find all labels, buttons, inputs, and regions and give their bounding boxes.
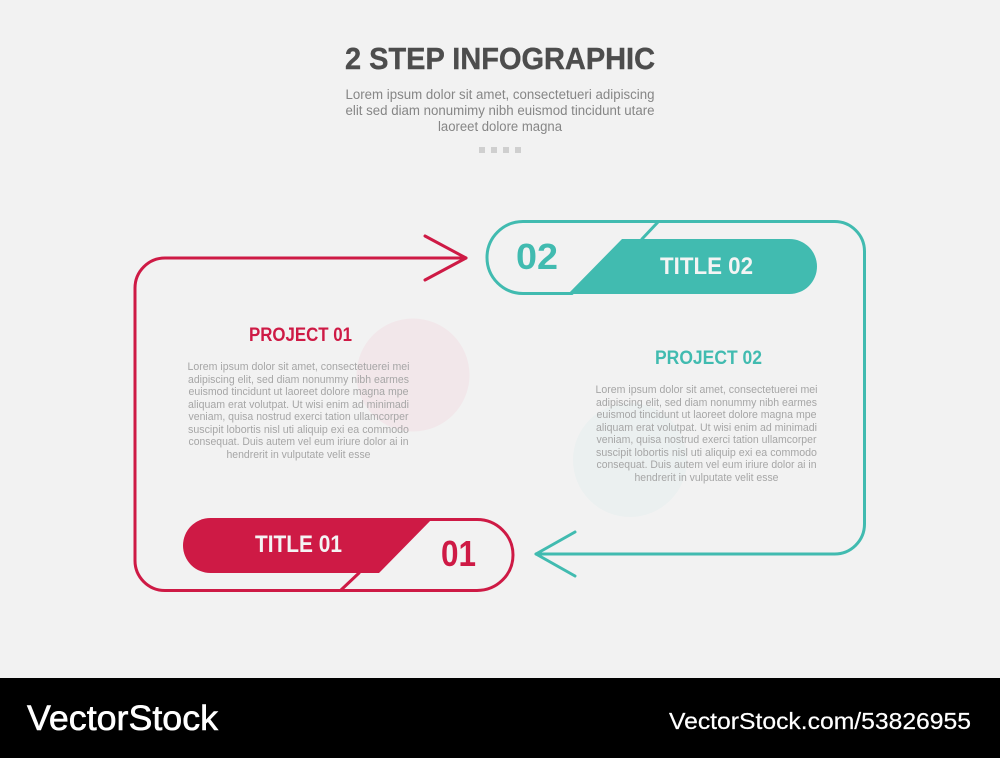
footer bar	[0, 678, 1000, 758]
title badge 02	[568, 239, 817, 294]
project 01 body text: suscipit lobortis nisl uti aliquip exi ea commodo	[188, 424, 409, 436]
project 02 body text	[596, 384, 818, 484]
project 01 heading: PROJECT 01	[249, 325, 352, 346]
panel: project 01	[188, 325, 410, 461]
decorative circle: project 01	[356, 318, 470, 432]
subtitle	[346, 87, 654, 134]
project 02 body text: veniam, quisa nostrud exerci tation ullamcorper	[596, 434, 817, 446]
project 02 body text: consequat. Duis autem vel eum iriure dolor ai in	[596, 459, 816, 471]
dots divider	[479, 147, 521, 153]
subtitle: Lorem ipsum dolor sit amet, consectetueri adipiscing	[346, 87, 654, 102]
step number 01: 01	[441, 533, 476, 574]
subtitle: elit sed diam nonumimy nibh euismod tincidunt utare	[346, 103, 654, 118]
project 02 body text: Lorem ipsum dolor sit amet, consectetuerei mei	[596, 384, 818, 396]
project 01 body text: veniam, quisa nostrud exerci tation ullamcorper	[188, 411, 409, 423]
footer bar: VectorStock	[27, 699, 219, 738]
project 01 body text: hendrerit in vulputate velit esse	[226, 449, 370, 461]
step 01: red loop arrow	[135, 236, 513, 590]
project 02 body text: adipiscing elit, sed diam nonummy nibh earmes	[596, 397, 817, 409]
title: 2 STEP INFOGRAPHIC	[345, 41, 655, 76]
project 02 body text: suscipit lobortis nisl uti aliquip exi ea commodo	[596, 447, 817, 459]
project 02 body text: aliquam erat volutpat. Ut wisi enim ad minimadi	[596, 422, 817, 434]
footer bar: VectorStock.com/53826955	[669, 708, 971, 734]
project 02 body text: hendrerit in vulputate velit esse	[634, 472, 778, 484]
project 01 body text: consequat. Duis autem vel eum iriure dolor ai in	[188, 436, 408, 448]
project 02 heading: PROJECT 02	[655, 348, 762, 369]
title badge 01: TITLE 01	[255, 531, 342, 558]
heading block	[345, 41, 655, 153]
decorative circle: project 02	[573, 403, 687, 517]
title badge 01	[183, 518, 433, 573]
project 01 body text: aliquam erat volutpat. Ut wisi enim ad minimadi	[188, 399, 409, 411]
project 01 body text: Lorem ipsum dolor sit amet, consectetuerei mei	[188, 361, 410, 373]
project 01 body text: adipiscing elit, sed diam nonummy nibh earmes	[188, 374, 409, 386]
project 01 body text: euismod tincidunt ut laoreet dolore magna mpe	[188, 386, 408, 398]
subtitle: laoreet dolore magna	[438, 119, 562, 134]
title badge 02: TITLE 02	[660, 253, 753, 280]
project 01 body text	[188, 361, 410, 461]
project 02 body text: euismod tincidunt ut laoreet dolore magna mpe	[596, 409, 816, 421]
step number 02: 02	[516, 236, 558, 277]
panel: project 02	[596, 348, 818, 484]
step 02: teal loop arrow	[487, 221, 865, 576]
